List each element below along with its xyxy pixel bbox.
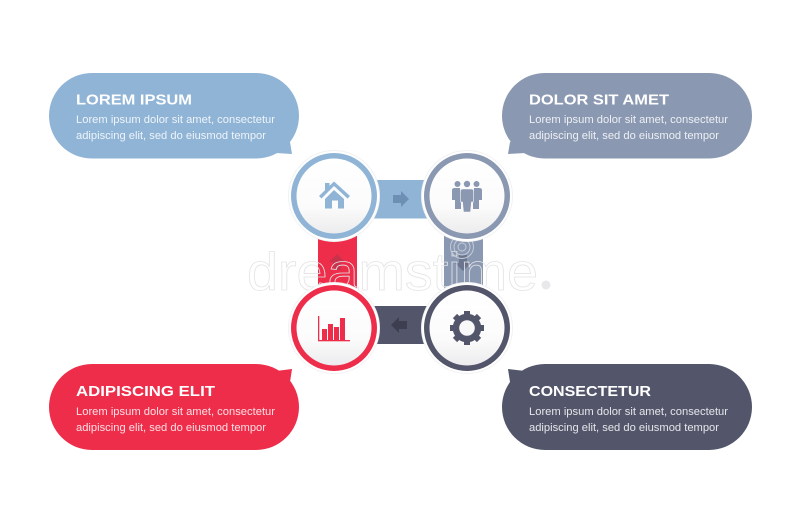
bubble: lorem ipsum — [49, 73, 299, 158]
text block: adipiscing elit: Lorem ipsum dolor sit amet, consectetur — [76, 406, 275, 418]
text block: dolor sit amet: adipiscing elit, sed do eiusmod tempor — [529, 130, 719, 142]
node: people — [422, 150, 512, 242]
text block: adipiscing elit: adipiscing elit, sed do eiusmod tempor — [76, 422, 266, 434]
heading: lorem ipsum: LOREM IPSUM — [76, 92, 192, 108]
text block: dolor sit amet: Lorem ipsum dolor sit amet, consectetur — [529, 114, 728, 126]
node: chart — [288, 282, 380, 374]
heading: adipiscing elit: ADIPISCING ELIT — [76, 383, 215, 400]
connector: right slate with down arrow — [444, 230, 483, 295]
connector: top blue with right arrow — [370, 180, 430, 218]
text block: lorem ipsum: adipiscing elit, sed do eiusmod tempor — [76, 130, 266, 142]
icon: home — [319, 182, 350, 208]
connector: left red with up arrow — [318, 230, 357, 295]
connector: bottom dark with left arrow — [370, 306, 430, 344]
bubble: adipiscing elit — [49, 364, 299, 450]
icon: bar chart — [318, 316, 350, 341]
bubble: dolor sit amet — [502, 73, 752, 158]
node: home — [288, 150, 380, 242]
text block: consectetur: Lorem ipsum dolor sit amet, consectetur — [529, 406, 728, 418]
icon: people — [452, 181, 482, 212]
bubble: consectetur — [502, 364, 752, 450]
heading: consectetur: CONSECTETUR — [529, 383, 651, 400]
text block: lorem ipsum: Lorem ipsum dolor sit amet, consectetur — [76, 114, 275, 126]
watermark: dreamstime — [247, 243, 538, 302]
heading: dolor sit amet: DOLOR SIT AMET — [529, 92, 669, 108]
text block: consectetur: adipiscing elit, sed do eiusmod tempor — [529, 422, 719, 434]
node: gear — [422, 282, 512, 374]
icon: gear — [450, 311, 484, 345]
